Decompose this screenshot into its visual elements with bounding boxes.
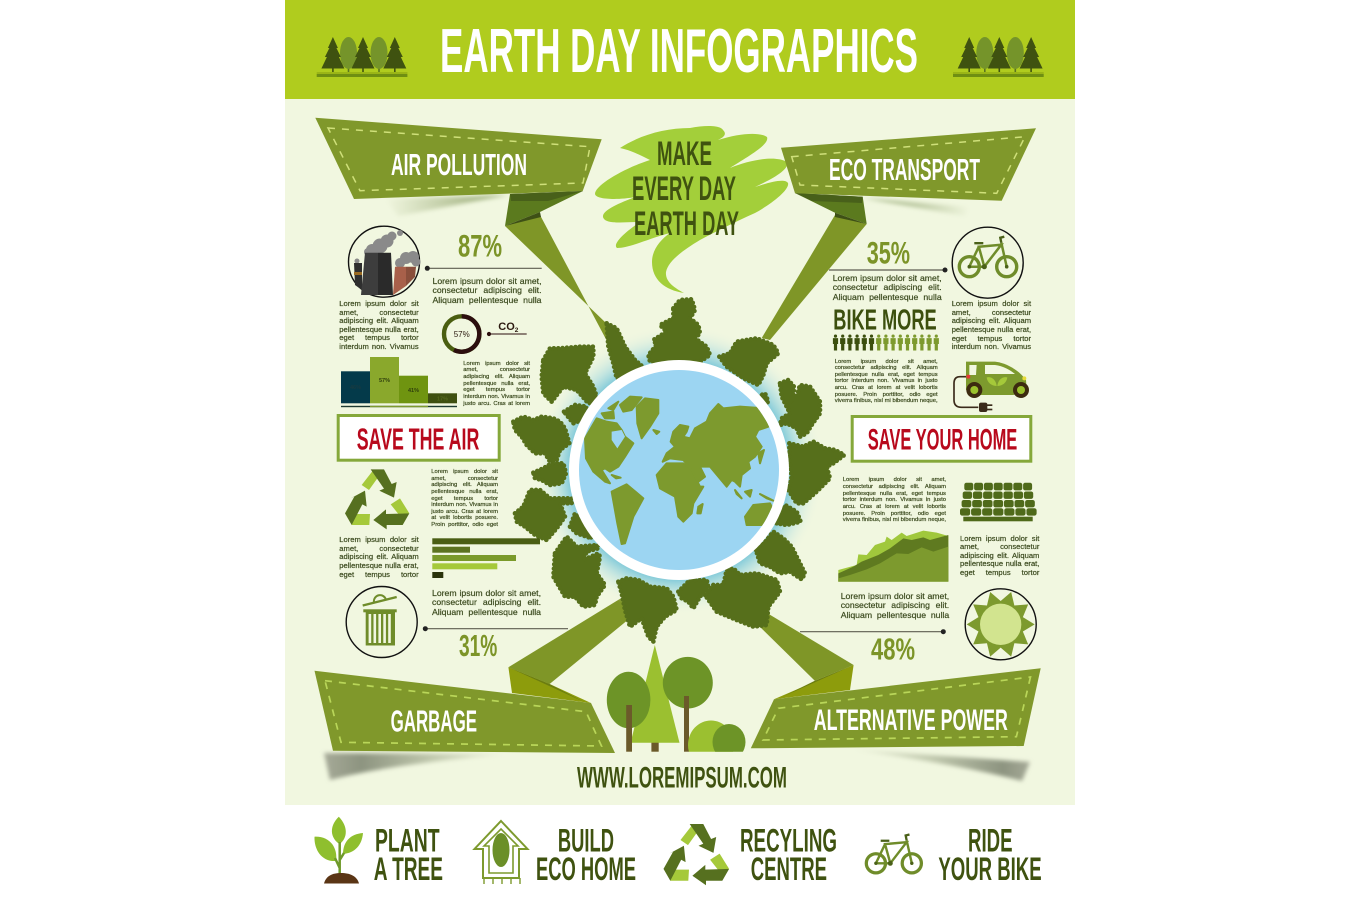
text block: beside bar chart: adipiscing elit. Aliquam <box>463 374 530 380</box>
text block: beside recycle icon: adipiscing elit. Aliquam <box>431 482 498 488</box>
donut chart: 57% CO2: 57% <box>454 330 470 339</box>
text block: eco transport intro: Lorem ipsum dolor sit amet, <box>833 273 942 283</box>
bar chart: air: 46% <box>350 385 361 391</box>
text block: eco transport intro: consectetur adipiscing elit. <box>833 282 942 292</box>
text block: under bicycle icon: Lorem ipsum dolor sit <box>952 299 1031 308</box>
stat: 35% with leader <box>829 234 948 272</box>
callout: save the air <box>338 416 499 460</box>
footer item: plant a tree: A TREE <box>374 851 443 887</box>
text block: garbage: Aliquam pellentesque nulla <box>432 607 541 617</box>
text block: under smokestacks: pellentesque nulla erat, <box>339 325 419 334</box>
text block: save your home: posuere. Proin porttitor, odio eget <box>843 511 946 517</box>
text block: beside bar chart: pellentesque nulla erat, <box>463 381 530 387</box>
text block: beside bar chart: amet, consectetur <box>463 367 530 373</box>
ribbon: garbage: GARBAGE <box>391 704 477 739</box>
text block: bike more: tortor interdum non. Vivamus in justo <box>835 378 938 384</box>
stat: 31% with leader <box>423 626 568 663</box>
text block: under bicycle icon <box>952 299 1032 351</box>
globe <box>569 360 789 580</box>
bar chart: horizontal <box>432 538 540 578</box>
text block: save your home: consectetur adipiscing elit. Aliquam <box>843 484 946 490</box>
text block: garbage: Lorem ipsum dolor sit amet, <box>432 588 541 598</box>
text block: bike more: arcu. Cras at lorem at velit lobortis <box>835 385 938 391</box>
text block: alternative power: Aliquam pellentesque nulla <box>841 610 949 620</box>
text block: beside bar chart <box>463 360 530 407</box>
ribbon: air pollution <box>315 118 608 343</box>
ribbon: air pollution: AIR POLLUTION <box>391 147 527 182</box>
callout: save the air: SAVE THE AIR <box>357 422 479 456</box>
heading: bike more with people row <box>833 304 939 350</box>
text block: under solar panel: eget tempus tortor <box>960 568 1039 577</box>
text block: bike more: posuere. Proin porttitor, odio eget <box>835 392 938 398</box>
text block: bike more: Lorem ipsum dolor sit amet, <box>835 359 938 365</box>
text block: air pollution intro <box>432 276 542 305</box>
text block: under solar panel: adipiscing elit. Aliquam <box>960 551 1039 560</box>
footer item: plant a tree: PLANT <box>375 823 440 859</box>
text block: beside recycle icon: Proin porttitor, odio eget <box>431 522 498 528</box>
text block: beside recycle icon: pellentesque nulla erat, <box>431 489 498 495</box>
text block: under recycle icon: amet, consectetur <box>339 544 419 553</box>
header banner <box>285 0 1075 99</box>
text block: under bicycle icon: eget tempus tortor <box>952 334 1031 343</box>
text block: save your home: arcu. Cras at lorem at velit lobortis <box>843 504 946 510</box>
text block: eco transport intro <box>832 273 942 302</box>
text block: save your home: pellentesque nulla erat, eget tempus <box>843 491 946 497</box>
text block: alternative power <box>840 590 950 620</box>
text block: under solar panel: Lorem ipsum dolor sit <box>960 534 1039 543</box>
text block: under solar panel: amet, consectetur <box>960 542 1039 551</box>
text block: garbage <box>432 588 542 617</box>
illustration: centre trees <box>606 645 746 752</box>
text block: under recycle icon <box>339 535 419 579</box>
icon: electric car <box>954 362 1029 412</box>
text block: under smokestacks: interdum non. Vivamus <box>339 342 419 351</box>
footer item: build eco home: ECO HOME <box>536 851 636 887</box>
callout: save your home: SAVE YOUR HOME <box>868 423 1017 456</box>
icon: header forest left <box>317 37 407 77</box>
stat: 87% with leader: 87% <box>458 228 502 264</box>
text block: eco transport intro: Aliquam pellentesque nulla <box>833 292 942 302</box>
footer item: ride your bike: RIDE <box>968 823 1012 859</box>
text block: under bicycle icon: interdum non. Vivamus <box>952 342 1031 351</box>
text block: under solar panel: pellentesque nulla erat, <box>960 559 1039 568</box>
text block: save your home: tortor interdum non. Vivamus in justo <box>843 497 946 503</box>
donut chart: 57% CO2 <box>444 316 527 352</box>
stat: 87% with leader <box>425 228 542 271</box>
text block: beside recycle icon: eget tempus tortor <box>431 496 498 502</box>
icon: bicycle in circle <box>952 227 1023 298</box>
text block: under smokestacks: eget tempus tortor <box>339 333 419 342</box>
text block: garbage: consectetur adipiscing elit. <box>432 597 541 607</box>
stat: 48% with leader <box>800 629 946 666</box>
slogan swirl: EARTH DAY <box>634 205 739 243</box>
stat: 48% with leader: 48% <box>871 632 915 666</box>
text block: air pollution intro: Lorem ipsum dolor sit amet, <box>432 276 542 286</box>
text block: beside recycle icon: amet, consectetur <box>431 476 498 482</box>
text block: under smokestacks: adipiscing elit. Aliquam <box>339 316 419 325</box>
icon: trash can <box>346 586 417 658</box>
footer item: build eco home <box>474 821 636 887</box>
text block: under recycle icon: pellentesque nulla erat, <box>339 561 419 570</box>
continents <box>585 397 773 544</box>
text block: under bicycle icon: adipiscing elit. Aliquam <box>952 316 1031 325</box>
text block: under solar panel <box>960 534 1040 577</box>
footer item: plant a tree <box>314 817 443 887</box>
text block: bike more: viverra finibus, nisl mi bibendum neque, <box>835 398 938 404</box>
text block: beside recycle icon: interdum non. Vivamus in <box>431 502 498 508</box>
text block: bike more: pellentesque nulla erat, eget tempus <box>835 372 938 378</box>
footer item: build eco home: BUILD <box>558 823 614 859</box>
text block: under smokestacks <box>339 299 419 351</box>
ribbon: eco transport: ECO TRANSPORT <box>829 152 980 187</box>
bar chart: air <box>341 357 457 407</box>
ribbon: garbage <box>314 597 640 780</box>
text block: save your home <box>842 476 946 523</box>
slogan swirl <box>595 126 788 293</box>
text block: beside recycle icon: at velit lobortis posuere. <box>431 515 498 521</box>
footer item: recycling centre <box>664 823 837 887</box>
panel: page background <box>285 0 1075 805</box>
bar chart: air: 57% <box>379 378 390 384</box>
icon: solar panel <box>960 483 1037 521</box>
url: WWW.LOREMIPSUM.COM <box>577 762 787 794</box>
text block: air pollution intro: consectetur adipiscing elit. <box>432 285 542 295</box>
donut chart: 57% CO2: CO <box>498 321 515 333</box>
text block: beside recycle icon: justo arcu. Cras at lorem <box>431 509 498 515</box>
bar chart: air: 17% <box>437 396 448 402</box>
ribbon: alternative power: ALTERNATIVE POWER <box>814 704 1008 737</box>
text block: beside bar chart: justo arcu. Cras at lorem <box>463 401 530 407</box>
icon: smokestacks <box>348 226 420 297</box>
text block: under recycle icon: eget tempus tortor <box>339 570 419 579</box>
trees around the globe <box>513 299 844 642</box>
text block: under recycle icon: Lorem ipsum dolor sit <box>339 535 419 544</box>
bar chart: air: 41% <box>408 388 419 394</box>
text block: alternative power: Lorem ipsum dolor sit amet, <box>841 590 949 600</box>
ribbon: alternative power <box>751 613 1041 781</box>
text block: beside bar chart: interdum non. Vivamus in <box>463 394 530 400</box>
text block: alternative power: consectetur adipiscing elit. <box>841 600 949 610</box>
text block: under recycle icon: adipiscing elit. Aliquam <box>339 552 419 561</box>
title: EARTH DAY INFOGRAPHICS <box>440 16 918 86</box>
footer item: recycling centre: CENTRE <box>751 851 827 887</box>
text block: air pollution intro: Aliquam pellentesque nulla <box>432 295 542 305</box>
callout: save your home <box>852 416 1031 461</box>
text block: beside recycle icon: Lorem ipsum dolor sit <box>431 469 498 475</box>
slogan swirl: EVERY DAY <box>632 170 736 208</box>
heading: bike more with people row: BIKE MORE <box>833 304 937 336</box>
text block: bike more: consectetur adipiscing elit. Aliquam <box>835 365 938 371</box>
ribbon: eco transport <box>762 128 1036 340</box>
text block: under smokestacks: Lorem ipsum dolor sit <box>339 299 419 308</box>
text block: under bicycle icon: pellentesque nulla erat, <box>952 325 1031 334</box>
footer item: ride your bike: YOUR BIKE <box>938 851 1042 887</box>
icon: recycle <box>345 469 409 529</box>
text block: bike more <box>834 358 938 404</box>
slogan swirl: MAKE <box>657 135 712 173</box>
icon: sun <box>965 589 1036 660</box>
text block: save your home: viverra finibus, nisl mi bibendum neque, <box>843 517 946 523</box>
stat: 31% with leader: 31% <box>459 629 497 663</box>
donut chart: 57% CO2: 2 <box>515 327 519 334</box>
stat: 35% with leader: 35% <box>867 234 910 270</box>
footer item: ride your bike <box>866 823 1042 887</box>
text block: beside bar chart: eget tempus tortor <box>463 387 530 393</box>
text block: under smokestacks: amet, consectetur <box>339 308 419 317</box>
footer item: recycling centre: RECYLING <box>740 823 837 859</box>
text block: under bicycle icon: amet, consectetur <box>952 308 1031 317</box>
globe glow <box>534 325 824 615</box>
area chart <box>838 531 948 582</box>
icon: header forest right <box>953 37 1044 77</box>
text block: beside bar chart: Lorem ipsum dolor sit <box>463 361 530 367</box>
text block: save your home: Lorem ipsum dolor sit amet, <box>843 477 946 483</box>
text block: beside recycle icon <box>431 468 498 528</box>
